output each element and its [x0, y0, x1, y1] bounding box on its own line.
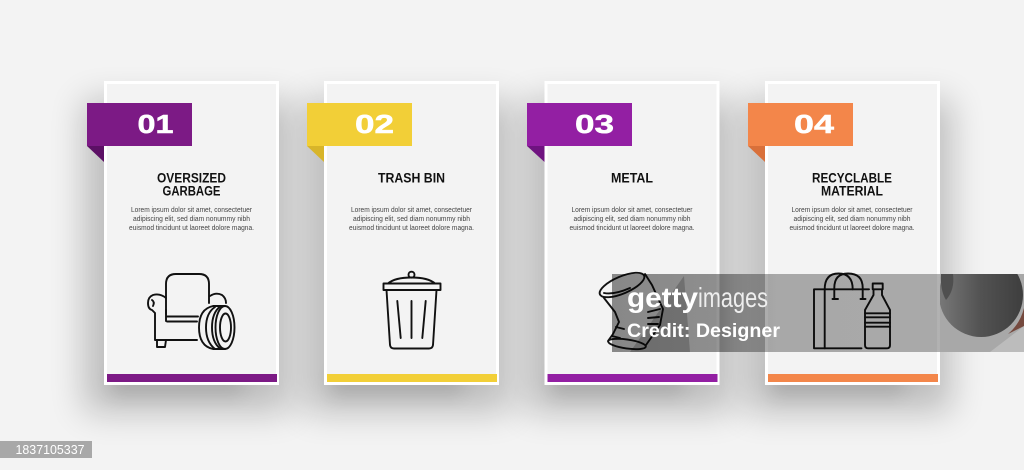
panel 3: metal [527, 82, 718, 384]
card 2 ribbon fold [307, 146, 324, 162]
card 1 body text: adipiscing elit, sed diam nonummy nibh [133, 216, 250, 223]
card 3 body text: euismod tincidunt ut laoreet dolore magna. [570, 225, 695, 232]
card 1 body text: Lorem ipsum dolor sit amet, consectetuer [131, 207, 253, 214]
panel 2: trash bin [307, 82, 498, 384]
card 2 heading: TRASH BIN [378, 170, 445, 186]
card 3 number ribbon [527, 103, 632, 146]
card 4 frame [766, 82, 938, 384]
card 4 ribbon fold [748, 146, 765, 162]
icon: shopping bag and bottle [814, 274, 890, 348]
card 4 number: 04 [794, 109, 835, 139]
card 3 heading: METAL [611, 170, 653, 186]
panel 1: oversized garbage [87, 82, 278, 384]
card 1 body text: euismod tincidunt ut laoreet dolore magna. [129, 225, 254, 232]
card 4 body text: euismod tincidunt ut laoreet dolore magna. [790, 225, 915, 232]
card 2 frame [326, 82, 498, 384]
watermark band [612, 274, 1024, 352]
panel 4: recyclable material [748, 82, 938, 384]
icon: armchair and tire [148, 274, 234, 349]
card 3 frame [546, 82, 718, 384]
card 1 heading: OVERSIZED [157, 170, 226, 186]
card 2 number: 02 [355, 109, 394, 139]
card 1 number ribbon [87, 103, 192, 146]
watermark logo: gettyimages [627, 282, 768, 313]
card 3 body text: Lorem ipsum dolor sit amet, consectetuer [572, 207, 693, 214]
card 1 ribbon fold [87, 146, 104, 162]
card 3 body text: adipiscing elit, sed diam nonummy nibh [574, 216, 691, 223]
card 3 ribbon fold [527, 146, 544, 162]
icon: trash bin [384, 272, 440, 348]
card 1 heading: GARBAGE [162, 184, 220, 198]
card 3 number: 03 [575, 109, 614, 139]
card 2 body text: Lorem ipsum dolor sit amet, consectetuer [351, 207, 473, 214]
card 1 number: 01 [138, 109, 174, 139]
card 2 bottom bar [327, 374, 497, 382]
card 4 body text: adipiscing elit, sed diam nonummy nibh [794, 216, 911, 223]
watermark dark circle area [940, 274, 1024, 352]
card 4 heading: MATERIAL [821, 184, 883, 198]
card 3 bottom bar [548, 374, 718, 382]
icon: crushed can [597, 268, 663, 351]
card 1 bottom bar [107, 374, 277, 382]
card 4 heading: RECYCLABLE [812, 170, 892, 186]
card 4 number ribbon [748, 103, 853, 146]
card 2 body text: euismod tincidunt ut laoreet dolore magna. [349, 225, 474, 232]
card 2 body text: adipiscing elit, sed diam nonummy nibh [353, 216, 470, 223]
image id tag [0, 441, 92, 458]
card 1 frame [106, 82, 278, 384]
watermark credit: Credit: Designer [627, 320, 780, 342]
image id tag: 1837105337 [16, 443, 85, 457]
card 4 bottom bar [768, 374, 938, 382]
card shadows [84, 100, 951, 412]
card 2 number ribbon [307, 103, 412, 146]
card 4 body text: Lorem ipsum dolor sit amet, consectetuer [792, 207, 913, 214]
